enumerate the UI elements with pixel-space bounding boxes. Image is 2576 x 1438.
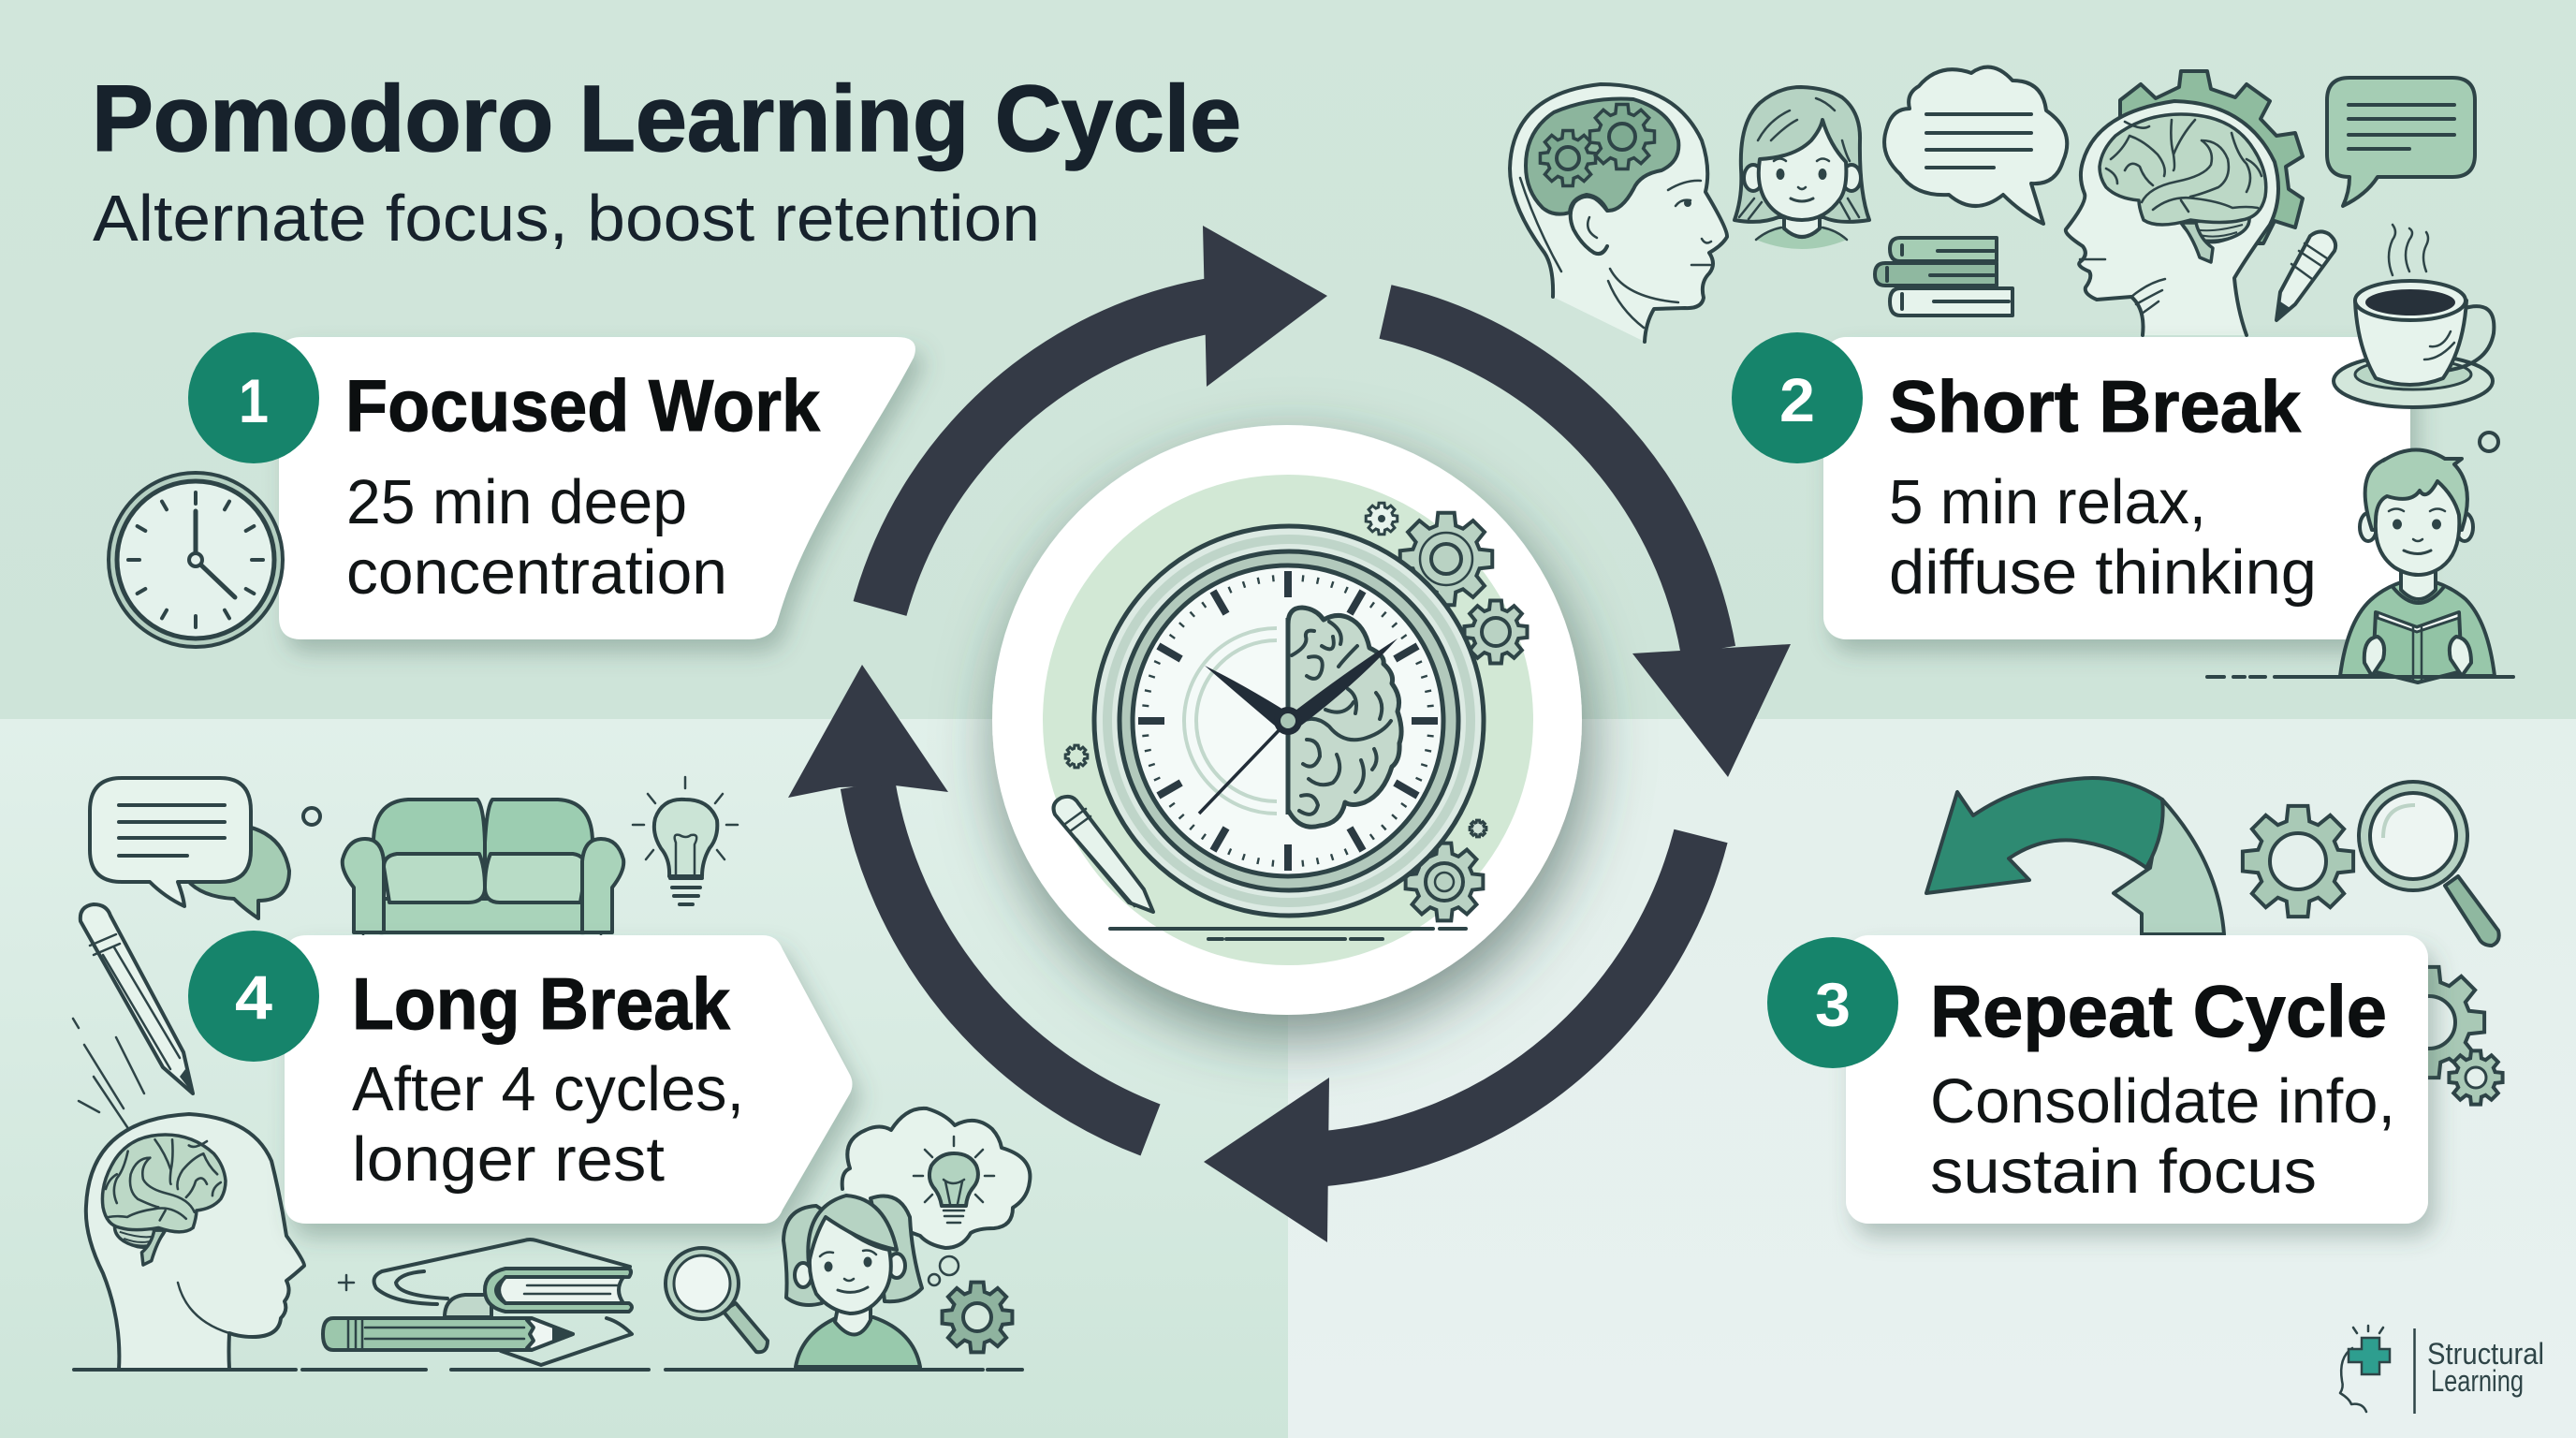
logo icon: [2340, 1326, 2390, 1412]
body 3: sustain focus: [1930, 1137, 2317, 1207]
card 4: [285, 935, 852, 1224]
girl figure: [783, 1196, 922, 1367]
illustration: stack of books: [1875, 238, 2012, 315]
body 2: diffuse thinking: [1889, 537, 2317, 608]
panel: step 2 short break: [1732, 332, 2410, 639]
illustration: head with brain and gear: [2066, 71, 2303, 335]
logo text: Structural: [2427, 1337, 2544, 1371]
badge 2: 2: [1779, 365, 1815, 434]
illustration: speech bubble: [2327, 78, 2475, 206]
body 2: [1889, 467, 2317, 608]
card 1: [279, 337, 915, 639]
heading 1: Focused Work: [345, 364, 821, 447]
icon: gear cluster behind clock: [1065, 503, 1527, 920]
half brain: [1288, 608, 1401, 827]
clock hands: [1199, 638, 1398, 814]
badge 1: [188, 332, 319, 463]
icon: thought dot: [2480, 433, 2498, 451]
body 3: [1930, 1066, 2395, 1207]
icon: gears behind card 3: [2374, 967, 2503, 1105]
logo: structural learning: [2340, 1326, 2544, 1414]
panel: step 1 focused work: [188, 332, 915, 639]
logo text: [2427, 1337, 2544, 1398]
illustration: profile head with brain: [86, 1114, 304, 1369]
icon: light bulb: [633, 777, 738, 904]
body 4: longer rest: [352, 1124, 665, 1195]
central disc: [992, 425, 1582, 1015]
illustration: girl with thought: [783, 1108, 1030, 1367]
body 4: [352, 1054, 744, 1195]
illustration: small pencil: [2276, 231, 2335, 320]
illustration: sofa: [343, 800, 623, 936]
body 3: Consolidate info,: [1930, 1066, 2395, 1137]
badge 2: [1732, 332, 1863, 463]
badge 3: 3: [1815, 970, 1851, 1039]
faint swirl rings: [1184, 628, 1277, 814]
logo text: Learning: [2431, 1364, 2524, 1398]
arrow: repeat cycle to long break: [1204, 836, 1701, 1242]
arrow: focused work to short break: [880, 226, 1327, 609]
thought cloud: [842, 1108, 1030, 1285]
icon: magnifier: [666, 1248, 768, 1352]
ground line: [74, 1368, 1022, 1372]
body 2: 5 min relax,: [1889, 467, 2206, 537]
badge 1: 1: [239, 366, 269, 435]
heading 2: Short Break: [1889, 365, 2302, 448]
badge 4: [188, 931, 319, 1062]
central clock with brain: [1054, 503, 1527, 939]
illustration: repeat arrow: [1926, 778, 2224, 934]
icon: gear lower left: [943, 1283, 1012, 1352]
panel: step 4 long break: [188, 931, 852, 1224]
icon: pencil by clock: [1054, 797, 1153, 912]
body 1: [346, 467, 727, 608]
card 3: [1846, 935, 2428, 1224]
illustration: girl portrait: [1734, 87, 1869, 249]
heading 3: Repeat Cycle: [1930, 970, 2387, 1052]
body 1: 25 min deep: [346, 467, 687, 537]
body 1: concentration: [346, 537, 727, 608]
heading 4: Long Break: [352, 962, 731, 1045]
badge 3: [1767, 937, 1898, 1068]
icon: long pencil: [73, 904, 193, 1133]
icon: gear and magnifier: [2243, 782, 2499, 946]
illustration: chat bubbles: [90, 778, 289, 918]
panel: step 3 repeat cycle: [1767, 935, 2428, 1224]
icon: coffee cup: [2334, 225, 2494, 407]
icon: small circle: [303, 808, 320, 825]
icon: wall clock: [109, 473, 283, 647]
body 4: After 4 cycles,: [352, 1054, 744, 1124]
clock rings: [1094, 526, 1484, 916]
illustration: books and pencil: [323, 1240, 632, 1365]
ground lines: [1110, 929, 1466, 939]
title: Pomodoro Learning Cycle: [92, 66, 1241, 171]
icon: boy reading: [2207, 449, 2513, 682]
illustration: head with gears: [1510, 84, 1727, 342]
badge 4: 4: [235, 962, 272, 1032]
arrow: long break to focused work: [788, 665, 1150, 1130]
subtitle: Alternate focus, boost retention: [93, 182, 1040, 255]
card 2: [1823, 337, 2410, 639]
illustration: speech cloud: [1884, 67, 2067, 224]
arrow: short break to repeat cycle: [1385, 312, 1791, 777]
clock ticks: [1138, 571, 1438, 871]
